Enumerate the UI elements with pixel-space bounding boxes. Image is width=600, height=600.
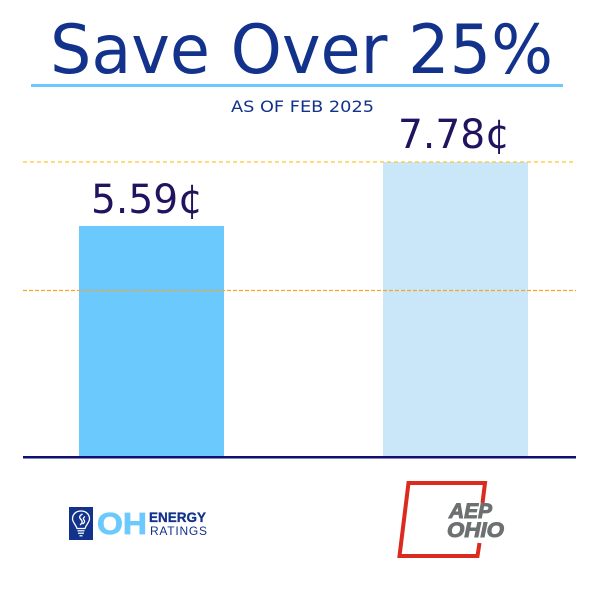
baseline axis: [23, 456, 576, 458]
logo frame: [400, 483, 485, 556]
reference line: middle: [23, 290, 576, 292]
logo text: OH: OH: [97, 506, 147, 541]
title underline: [31, 84, 563, 87]
bar: AEP Ohio: [383, 162, 528, 457]
logo text: AEP: AEP: [448, 500, 493, 523]
value label: 5.59 cents: 5.59¢: [91, 177, 203, 223]
bar: OH Energy Ratings: [79, 226, 224, 457]
logo: OH Energy Ratings: [69, 506, 207, 541]
title: Save Over 25%: [50, 11, 553, 90]
logo text: RATINGS: RATINGS: [150, 524, 207, 538]
reference line: top: [23, 161, 576, 163]
subtitle: AS OF FEB 2025: [231, 97, 374, 116]
logo text: OHIO: OHIO: [447, 519, 504, 542]
logo: AEP Ohio: [400, 483, 504, 556]
icon: light bulb badge: [69, 507, 93, 540]
logo text: ENERGY: ENERGY: [149, 509, 207, 525]
value label: 7.78 cents: 7.78¢: [398, 112, 510, 158]
